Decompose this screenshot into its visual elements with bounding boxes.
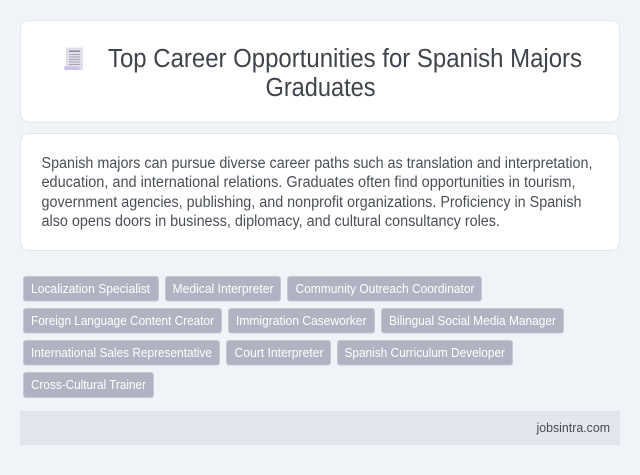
tag: Spanish Curriculum Developer: Spanish Curriculum Developer	[344, 345, 506, 360]
tag: Court Interpreter: Court Interpreter	[234, 345, 324, 360]
header panel	[20, 20, 620, 122]
tag: Medical Interpreter	[166, 276, 280, 301]
footer site name: jobsintra.com	[536, 421, 610, 435]
tag: Spanish Curriculum Developer	[338, 340, 512, 365]
description text: government agencies, publishing, and nonprofit organizations. Proficiency in Spanish	[42, 194, 582, 211]
footer bar	[20, 411, 620, 445]
tag: Immigration Caseworker: Immigration Caseworker	[236, 313, 367, 328]
icon: paper scroll	[64, 48, 83, 70]
tag: Bilingual Social Media Manager	[382, 308, 564, 333]
tag: Community Outreach Coordinator: Community Outreach Coordinator	[296, 281, 475, 296]
career tags	[24, 276, 564, 398]
tag: International Sales Representative	[24, 340, 220, 365]
description text: education, and international relations. Graduates often find opportunities in tourism,	[42, 174, 576, 191]
tag: Foreign Language Content Creator: Foreign Language Content Creator	[31, 313, 215, 328]
description panel	[20, 134, 620, 250]
title: Graduates	[266, 74, 376, 102]
tag: Medical Interpreter: Medical Interpreter	[172, 281, 274, 296]
tag: International Sales Representative: International Sales Representative	[31, 345, 212, 360]
title	[108, 45, 582, 102]
title: Top Career Opportunities for Spanish Majors	[108, 45, 582, 73]
tag: Bilingual Social Media Manager: Bilingual Social Media Manager	[389, 313, 557, 328]
description text: Spanish majors can pursue diverse career paths such as translation and interpretation,	[42, 155, 592, 172]
tag: Localization Specialist: Localization Specialist	[31, 281, 150, 296]
tag: Community Outreach Coordinator	[288, 276, 482, 301]
tag: Cross-Cultural Trainer	[24, 372, 154, 398]
tag: Foreign Language Content Creator	[24, 308, 222, 333]
tag: Cross-Cultural Trainer: Cross-Cultural Trainer	[31, 377, 147, 392]
description text	[42, 155, 592, 230]
tag: Localization Specialist	[24, 276, 158, 301]
tag: Court Interpreter	[226, 340, 330, 365]
tag: Immigration Caseworker	[228, 308, 374, 333]
description text: also opens doors in business, diplomacy, and cultural consultancy roles.	[42, 213, 500, 230]
